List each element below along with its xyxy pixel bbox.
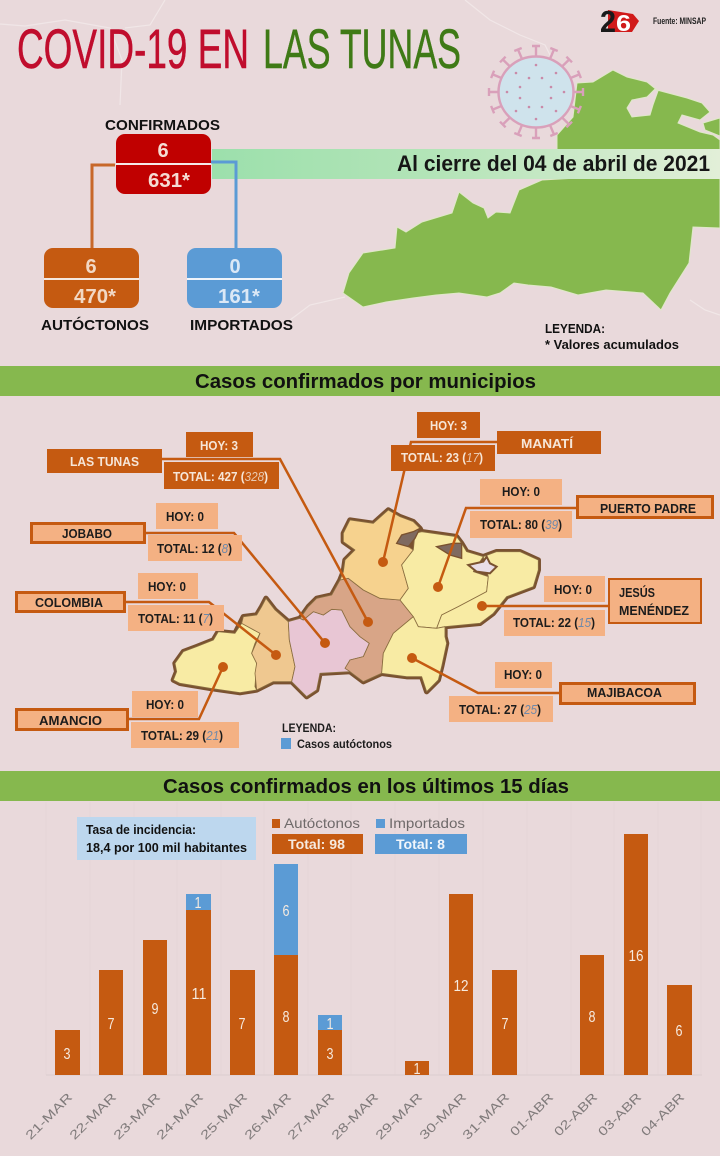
callout: Manati: MANATÍ [521, 436, 573, 451]
bar chart: 24-MAR [154, 1090, 206, 1143]
bar chart: 31-MAR [460, 1090, 512, 1143]
callout: Amancio: AMANCIO [39, 713, 102, 728]
bar chart: 8 [588, 1009, 596, 1026]
connector: confirmados to autoctonos [92, 165, 115, 248]
callout: Amancio [16, 662, 239, 748]
bar chart: 22-MAR [67, 1090, 119, 1143]
callout: Las Tunas: HOY: 3 [200, 438, 238, 453]
callout: Jobabo: HOY: 0 [166, 509, 204, 524]
logo: 26: 2 [600, 4, 616, 39]
callout: Amancio: TOTAL: 29 (21) [141, 728, 223, 743]
legend: autoctonos total: Total: 98 [288, 836, 345, 852]
bar chart: 12 [454, 978, 469, 995]
bar chart: 7 [238, 1016, 246, 1033]
panel: confirmados: 631* [148, 170, 190, 192]
heading: municipios [0, 366, 720, 396]
bar chart: 6 [282, 903, 290, 920]
title: LAS TUNAS [263, 17, 461, 80]
municipal map [173, 510, 538, 697]
panel: importados: 0 [229, 256, 241, 278]
bar chart [23, 802, 702, 1143]
callout: Las Tunas [47, 432, 373, 627]
callout: Majibacoa: TOTAL: 27 (25) [459, 702, 541, 717]
logo: 26 [600, 4, 639, 39]
bar chart: 27-MAR [285, 1090, 337, 1143]
callout: Jobabo: JOBABO [62, 526, 112, 541]
heading: municipios: Casos confirmados por municipios [195, 371, 536, 393]
callout: Jobabo: TOTAL: 12 (8) [157, 541, 232, 556]
legend: map: Casos autóctonos [297, 739, 392, 751]
callout: Majibacoa: HOY: 0 [504, 667, 542, 682]
callout: Puerto Padre [433, 479, 712, 592]
bar chart: 26-MAR [242, 1090, 294, 1143]
legend: importados total [375, 815, 467, 854]
panel: importados: 161* [218, 286, 260, 308]
panel: autoctonos: 470* [74, 286, 116, 308]
callout: incidence rate [77, 817, 256, 860]
callout: Jesus Menendez: JESÚS [619, 585, 655, 600]
callout: Manati: TOTAL: 23 (17) [401, 450, 483, 465]
callout: Amancio: HOY: 0 [146, 697, 184, 712]
callout: Las Tunas: LAS TUNAS [70, 454, 139, 469]
icon: virus [489, 46, 583, 138]
legend: map: LEYENDA: [282, 723, 336, 735]
bar chart: 23-MAR [111, 1090, 163, 1143]
bar chart: 6 [676, 1023, 683, 1040]
bar chart: 9 [152, 1001, 159, 1018]
panel: importados: IMPORTADOS [190, 317, 293, 334]
callout: Majibacoa: MAJIBACOA [587, 685, 663, 700]
callout: incidence rate: 18,4 por 100 mil habitantes [86, 840, 247, 855]
title: COVID-19 EN [17, 17, 249, 80]
bar chart: 1 [326, 1016, 334, 1033]
bar chart: 3 [64, 1046, 71, 1063]
bar chart: 1 [194, 895, 202, 912]
bar chart: 1 [414, 1061, 421, 1078]
panel: autoctonos: AUTÓCTONOS [41, 316, 149, 334]
callout: Jesus Menendez: TOTAL: 22 (15) [513, 615, 595, 630]
callout: Manati [378, 412, 601, 567]
callout: Jesus Menendez: MENÉNDEZ [619, 603, 689, 618]
bar chart: 04-ABR [638, 1090, 687, 1139]
legend: accumulated values [545, 321, 679, 352]
legend: accumulated values: * Valores acumulados [545, 337, 679, 352]
bar chart: 29-MAR [373, 1090, 425, 1143]
bar chart: 30-MAR [417, 1090, 469, 1143]
legend: autoctonos total: Autóctonos [284, 815, 360, 831]
panel: autoctonos: 6 [85, 256, 97, 278]
callout: Jobabo [32, 503, 330, 648]
callout: Las Tunas: TOTAL: 427 (328) [173, 469, 268, 484]
panel: autoctonos [41, 248, 149, 334]
callout: Colombia: HOY: 0 [148, 579, 186, 594]
bar chart: 16 [628, 948, 644, 965]
legend: autoctonos total [272, 815, 363, 854]
panel: confirmados: 6 [157, 140, 169, 162]
legend: importados total: Importados [389, 815, 465, 831]
bar chart: 03-ABR [595, 1090, 644, 1139]
logo: 26: 6 [616, 10, 631, 36]
date banner: Al cierre del 04 de abril de 2021 [397, 151, 710, 176]
background map of Las Tunas [343, 70, 720, 310]
bar chart: 7 [108, 1016, 115, 1033]
callout: Puerto Padre: TOTAL: 80 (39) [480, 517, 562, 532]
bar chart: 11 [192, 986, 207, 1003]
callout: Jesus Menendez: HOY: 0 [554, 582, 592, 597]
bar chart: 02-ABR [551, 1090, 600, 1139]
callout: Manati: HOY: 3 [430, 418, 467, 433]
callout: Colombia: COLOMBIA [35, 595, 104, 610]
callout: Colombia: TOTAL: 11 (7) [138, 611, 213, 626]
heading: ultimos 15 dias: Casos confirmados en los últimos 15 días [163, 776, 569, 798]
callout: Colombia [16, 573, 281, 660]
bar chart: 01-ABR [507, 1090, 556, 1139]
callout: Puerto Padre: HOY: 0 [502, 484, 540, 499]
connector: confirmados to importados [210, 162, 236, 248]
bar chart: 3 [326, 1046, 334, 1063]
callout: Puerto Padre: PUERTO PADRE [600, 501, 696, 516]
heading: ultimos 15 dias [0, 771, 720, 801]
callout: Majibacoa [407, 653, 694, 722]
legend: importados total: Total: 8 [396, 836, 445, 852]
legend: map [281, 723, 392, 751]
bar chart: 25-MAR [198, 1090, 250, 1143]
panel: importados [187, 248, 293, 334]
bar chart: 28-MAR [329, 1090, 381, 1143]
bar chart: 8 [282, 1009, 290, 1026]
bar chart: 7 [502, 1016, 509, 1033]
callout: incidence rate: Tasa de incidencia: [86, 822, 196, 837]
date banner [212, 149, 720, 179]
legend: accumulated values: LEYENDA: [545, 321, 605, 336]
callout: Jesus Menendez [477, 576, 701, 636]
bar chart: 21-MAR [23, 1090, 75, 1143]
panel: confirmados: CONFIRMADOS [105, 117, 220, 134]
panel: confirmados [105, 117, 220, 194]
